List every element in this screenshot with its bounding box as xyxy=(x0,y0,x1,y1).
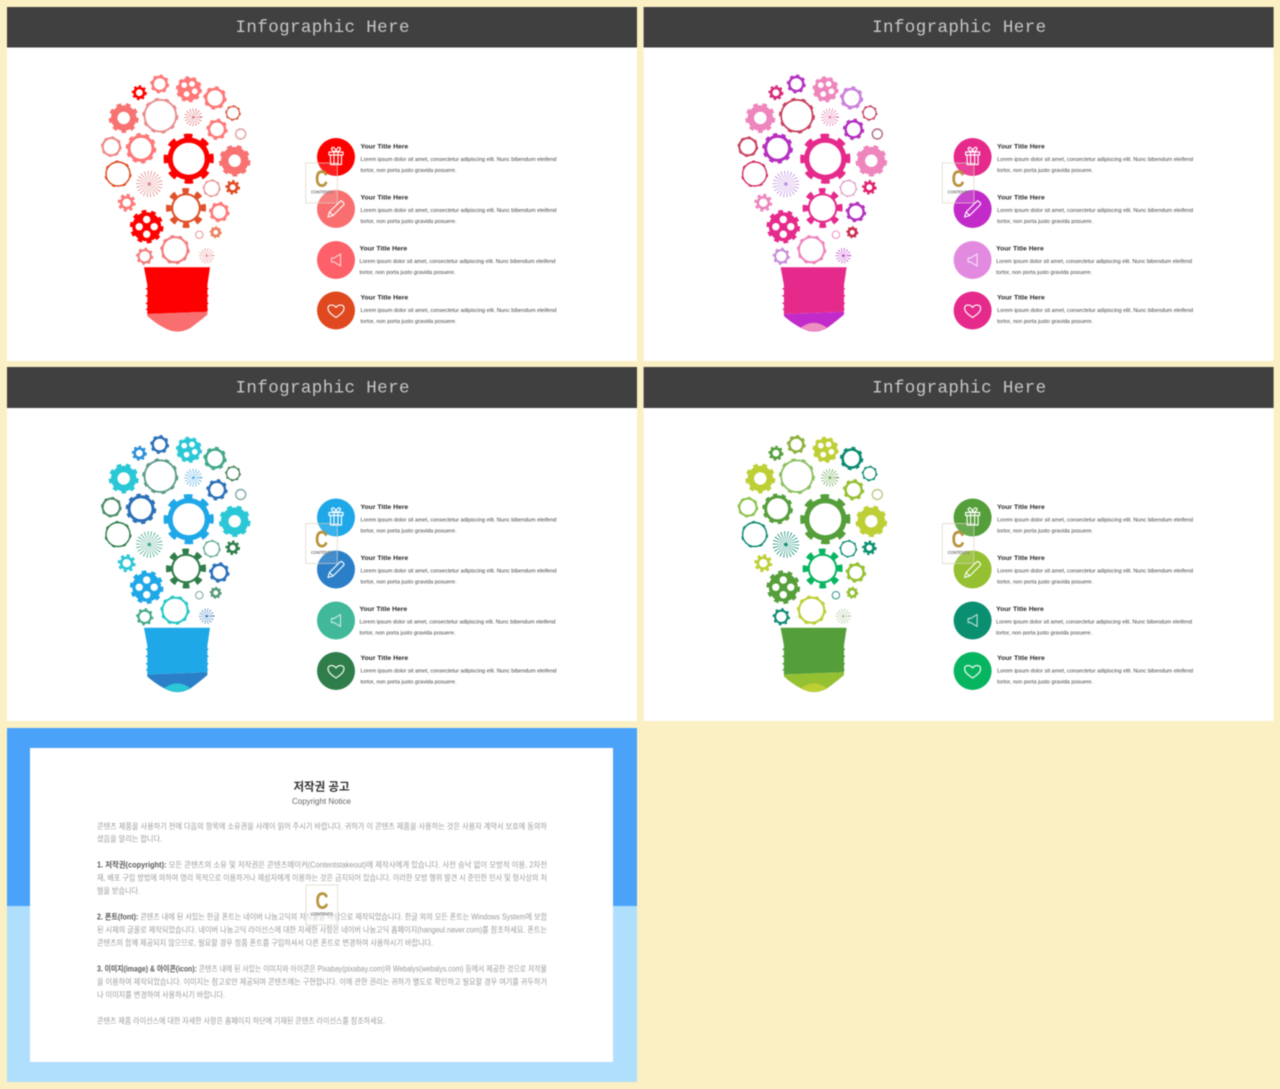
watermark: C xyxy=(952,166,965,193)
bulb of gears xyxy=(102,436,249,624)
watermark: C xyxy=(315,526,328,554)
header bar xyxy=(644,7,1274,48)
list item 4 xyxy=(954,292,1193,330)
list item 2: Lorem ipsum dolor sit amet, consectetur adipiscing elit. Nunc bibendum eleifend xyxy=(997,208,1193,214)
bulb of gears xyxy=(102,75,249,264)
list item 1: Your Title Here xyxy=(360,144,408,150)
list item 2: tortor, non porta justo gravida posuere. xyxy=(997,219,1094,225)
watermark: CONTENTS xyxy=(948,550,970,555)
image and icon paragraph xyxy=(97,964,547,1000)
list item 1: Your Title Here xyxy=(997,144,1045,150)
list item 2: Your Title Here xyxy=(997,555,1045,562)
list item 1: tortor, non porta justo gravida posuere. xyxy=(360,528,457,534)
list item 3: Your Title Here xyxy=(996,246,1044,252)
closing line: 콘텐츠 제품 라이선스에 대한 자세한 사항은 홈페이지 하단에 기재된 콘텐츠 라이선스를 참조하세요. xyxy=(97,1016,385,1026)
list item 4: tortor, non porta justo gravida posuere. xyxy=(360,680,457,686)
intro paragraph: 셨음을 알리는 합니다. xyxy=(97,834,162,844)
list item 4: Your Title Here xyxy=(360,655,408,662)
list item 3: Your Title Here xyxy=(360,606,407,613)
list item 4: Lorem ipsum dolor sit amet, consectetur adipiscing elit. Nunc bibendum eleifend xyxy=(997,668,1193,674)
watermark xyxy=(306,163,337,203)
image and icon paragraph: 나 이미지를 변경하여 사용하시기 바랍니다. xyxy=(97,990,225,1000)
panel: blue lightbulb infographic xyxy=(7,367,637,721)
header bar: Infographic Here xyxy=(236,18,410,38)
watermark: CONTENTS xyxy=(311,912,333,916)
bulb of gears xyxy=(738,436,886,624)
copyright paragraph: 재, 배포 구입 방법에 의하여 영리 목적으로 이용하거나 제삼자에게 이용하는 것은 금지되어 있습니다. 이러한 모방 행위 발견 시 준민한 민사 및 형사상의 처 xyxy=(97,872,547,882)
list item 1: Your Title Here xyxy=(360,504,408,511)
watermark: CONTENTS xyxy=(311,550,333,555)
list item 2 xyxy=(317,550,556,588)
list item 1 xyxy=(954,138,1193,176)
list item 3: Your Title Here xyxy=(996,606,1044,613)
font paragraph: 콘텐츠의 함께 제공되지 않으므로, 필요할 경우 정품 폰트를 구입하셔서 다른 폰트로 변경하여 사용하시기 바랍니다. xyxy=(97,938,433,948)
list item 4 xyxy=(317,292,556,330)
list item 4: Lorem ipsum dolor sit amet, consectetur adipiscing elit. Nunc bibendum eleifend xyxy=(997,308,1193,314)
header bar xyxy=(644,367,1274,408)
list item 3: Lorem ipsum dolor sit amet, consectetur adipiscing elit. Nunc bibendum eleifend xyxy=(360,620,556,626)
watermark: C xyxy=(315,166,328,193)
watermark: C xyxy=(316,888,328,915)
list item 1: Lorem ipsum dolor sit amet, consectetur adipiscing elit. Nunc bibendum eleifend xyxy=(997,518,1193,524)
list item 4: Lorem ipsum dolor sit amet, consectetur adipiscing elit. Nunc bibendum eleifend xyxy=(360,308,556,314)
list item 4: tortor, non porta justo gravida posuere. xyxy=(997,319,1094,325)
list item 2 xyxy=(954,190,1193,228)
watermark xyxy=(942,524,974,564)
image and icon paragraph: 3. 이미지(image) & 아이콘(icon): 콘텐츠 내에 된 사있는 이미지와 아이콘은 Pixabay(pixabay.com)와 Webalys(webalys.com) 등에서 제공한 것으로 저작물 xyxy=(97,964,547,974)
header bar: Infographic Here xyxy=(236,378,410,398)
panel: red lightbulb infographic xyxy=(7,7,637,361)
list item 1: tortor, non porta justo gravida posuere. xyxy=(360,168,457,174)
watermark xyxy=(306,885,338,925)
list item 4: Your Title Here xyxy=(997,655,1045,662)
list item 2 xyxy=(317,190,556,228)
list item 4: tortor, non porta justo gravida posuere. xyxy=(997,680,1094,686)
bulb screw base xyxy=(144,267,210,332)
copyright paragraph: 1. 저작권(copyright): 모든 콘텐츠의 소유 및 저작권은 콘텐츠메이커(Contentstakeout)에 제작사에게 있습니다. 사전 승낙 없이 모방적 이용, 2차전 xyxy=(97,860,547,870)
list item 3: tortor, non porta justo gravida posuere. xyxy=(360,270,456,276)
header bar: Infographic Here xyxy=(872,378,1046,398)
list item 4: Your Title Here xyxy=(997,294,1045,302)
list item 2: tortor, non porta justo gravida posuere. xyxy=(360,219,457,225)
list item 3: Lorem ipsum dolor sit amet, consectetur adipiscing elit. Nunc bibendum eleifend xyxy=(996,620,1192,626)
watermark xyxy=(306,524,337,564)
list item 3 xyxy=(317,602,556,640)
list item 3: Lorem ipsum dolor sit amet, consectetur adipiscing elit. Nunc bibendum eleifend xyxy=(360,259,556,265)
list item 4 xyxy=(317,652,556,690)
bulb screw base xyxy=(781,628,847,692)
header bar: Infographic Here xyxy=(872,18,1046,38)
bulb screw base xyxy=(144,628,210,692)
intro paragraph xyxy=(97,821,548,844)
intro paragraph: 콘텐츠 제품을 사용하기 전에 다음의 항목에 소유권을 사례이 읽어 주시기 바랍니다. 귀하가 이 콘텐츠 제품을 사용하는 것은 사용자 계약서 보호에 동의하 xyxy=(97,821,548,831)
list item 1: Lorem ipsum dolor sit amet, consectetur adipiscing elit. Nunc bibendum eleifend xyxy=(997,157,1193,163)
list item 3: Your Title Here xyxy=(360,246,407,252)
list item 4: Lorem ipsum dolor sit amet, consectetur adipiscing elit. Nunc bibendum eleifend xyxy=(360,668,556,674)
list item 2: Your Title Here xyxy=(360,194,408,202)
list item 2: Lorem ipsum dolor sit amet, consectetur adipiscing elit. Nunc bibendum eleifend xyxy=(997,568,1193,574)
list item 2: Lorem ipsum dolor sit amet, consectetur adipiscing elit. Nunc bibendum eleifend xyxy=(360,208,556,214)
list item 2: Lorem ipsum dolor sit amet, consectetur adipiscing elit. Nunc bibendum eleifend xyxy=(360,568,556,574)
list item 1: Your Title Here xyxy=(997,504,1045,511)
list item 1 xyxy=(317,498,556,536)
list item 1 xyxy=(954,498,1193,536)
list item 4: tortor, non porta justo gravida posuere. xyxy=(360,319,457,325)
watermark: CONTENTS xyxy=(948,190,970,194)
list item 2 xyxy=(954,550,1193,588)
bulb of gears xyxy=(738,75,886,264)
list item 3 xyxy=(317,241,556,279)
list item 1 xyxy=(317,138,556,176)
list item 3: Lorem ipsum dolor sit amet, consectetur adipiscing elit. Nunc bibendum eleifend xyxy=(996,259,1192,265)
copyright paragraph xyxy=(97,860,547,896)
watermark: C xyxy=(952,526,965,554)
image and icon paragraph: 을 이용하여 제작되었습니다. 이미지는 참고로만 제공되며 콘텐츠에는 구현합니다. 이에 관한 권리는 귀하가 별도로 확인하고 필요할 경우 여기를 귀두하거 xyxy=(97,976,547,986)
font paragraph xyxy=(97,912,548,948)
list item 4: Your Title Here xyxy=(360,294,408,302)
notice title: 저작권 공고 xyxy=(293,780,350,794)
list item 3: tortor, non porta justo gravida posuere. xyxy=(360,630,456,636)
panel: magenta lightbulb infographic xyxy=(644,7,1274,361)
list item 2: tortor, non porta justo gravida posuere. xyxy=(997,580,1094,586)
copyright paragraph: 벌을 받습니다. xyxy=(97,886,140,896)
watermark: CONTENTS xyxy=(311,190,333,194)
list item 3: tortor, non porta justo gravida posuere. xyxy=(996,630,1093,636)
list item 3 xyxy=(954,602,1192,640)
panel: copyright notice xyxy=(7,728,637,1082)
list item 3: tortor, non porta justo gravida posuere. xyxy=(996,270,1093,276)
header bar xyxy=(7,7,637,48)
font paragraph: 2. 폰트(font): 콘텐츠 내에 된 서있는 한글 폰트는 네이버 나눔고딕의 저작물을 바탕으로 제작되었습니다. 한글 외의 모든 폰트는 Windows System에 보함 xyxy=(97,912,548,922)
list item 3 xyxy=(954,241,1192,279)
panel: green lightbulb infographic xyxy=(644,367,1274,721)
bulb screw base xyxy=(781,267,847,332)
list item 2: Your Title Here xyxy=(997,194,1045,202)
list item 4 xyxy=(954,652,1193,690)
watermark xyxy=(942,163,974,203)
notice subtitle: Copyright Notice xyxy=(292,796,351,806)
list item 1: tortor, non porta justo gravida posuere. xyxy=(997,528,1094,534)
header bar xyxy=(7,367,637,408)
list item 1: Lorem ipsum dolor sit amet, consectetur adipiscing elit. Nunc bibendum eleifend xyxy=(360,157,556,163)
list item 2: tortor, non porta justo gravida posuere. xyxy=(360,580,457,586)
list item 1: tortor, non porta justo gravida posuere. xyxy=(997,168,1094,174)
list item 1: Lorem ipsum dolor sit amet, consectetur adipiscing elit. Nunc bibendum eleifend xyxy=(360,518,556,524)
list item 2: Your Title Here xyxy=(360,555,408,562)
font paragraph: 된 시체의 글꼴로 제작되었습니다. 네이버 나눔고딕 라이선스에 대한 자세한 사항은 네이버 나눔고딕 홈페이지(hangeul.naver.com)를 참조하세요. 폰트는 xyxy=(97,924,547,934)
